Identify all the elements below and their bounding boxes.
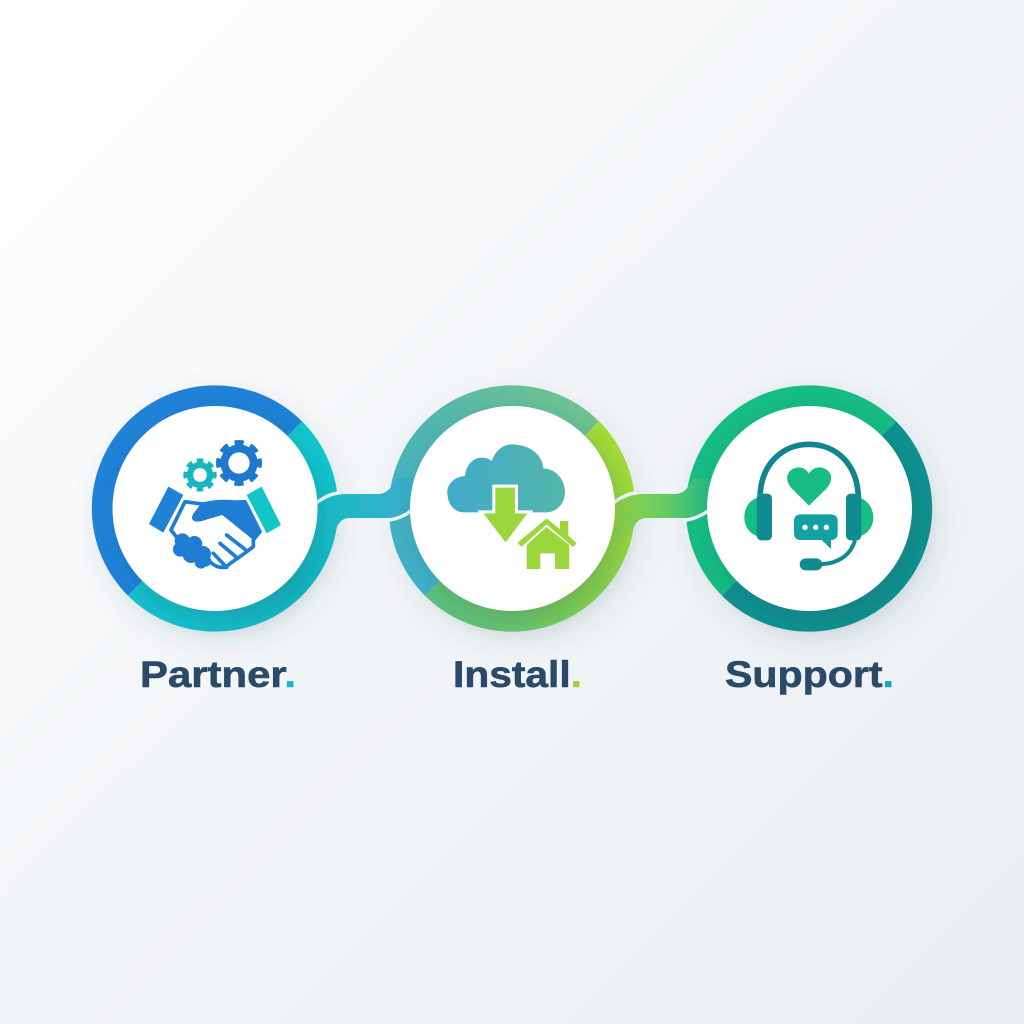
left cuff — [149, 487, 183, 533]
download arrow — [483, 488, 527, 542]
icon: teal gear — [186, 461, 214, 489]
outer ring shadows — [93, 386, 931, 630]
ear lobes — [744, 498, 873, 536]
fist — [173, 533, 211, 569]
microphone — [800, 540, 855, 570]
icon: cloud download with house — [447, 444, 577, 569]
ear cups — [757, 494, 861, 540]
chat bubble — [794, 514, 838, 549]
cloud — [447, 444, 565, 512]
white disc: partner — [112, 406, 318, 611]
right cuff — [247, 487, 281, 533]
label: Partner: Partner . — [140, 654, 296, 695]
white disc: install — [410, 406, 615, 611]
heart — [787, 467, 831, 506]
headband — [760, 444, 858, 499]
finger lines — [213, 535, 247, 567]
white disc: support — [707, 406, 912, 611]
connector: partner to install — [312, 478, 414, 536]
house — [518, 518, 577, 569]
icon: handshake with gears — [149, 443, 281, 569]
icon: blue gear — [219, 443, 259, 483]
label: Install: Install . — [453, 654, 582, 695]
icon: headset with heart and chat — [744, 444, 873, 570]
ring: install — [400, 396, 624, 621]
label: Support: Support . — [725, 654, 894, 695]
handshake — [149, 487, 281, 569]
connector: install to support — [609, 478, 711, 536]
white hand — [171, 502, 260, 567]
ring: support — [697, 396, 921, 621]
blue hand — [192, 500, 260, 540]
ring: partner — [103, 396, 327, 621]
